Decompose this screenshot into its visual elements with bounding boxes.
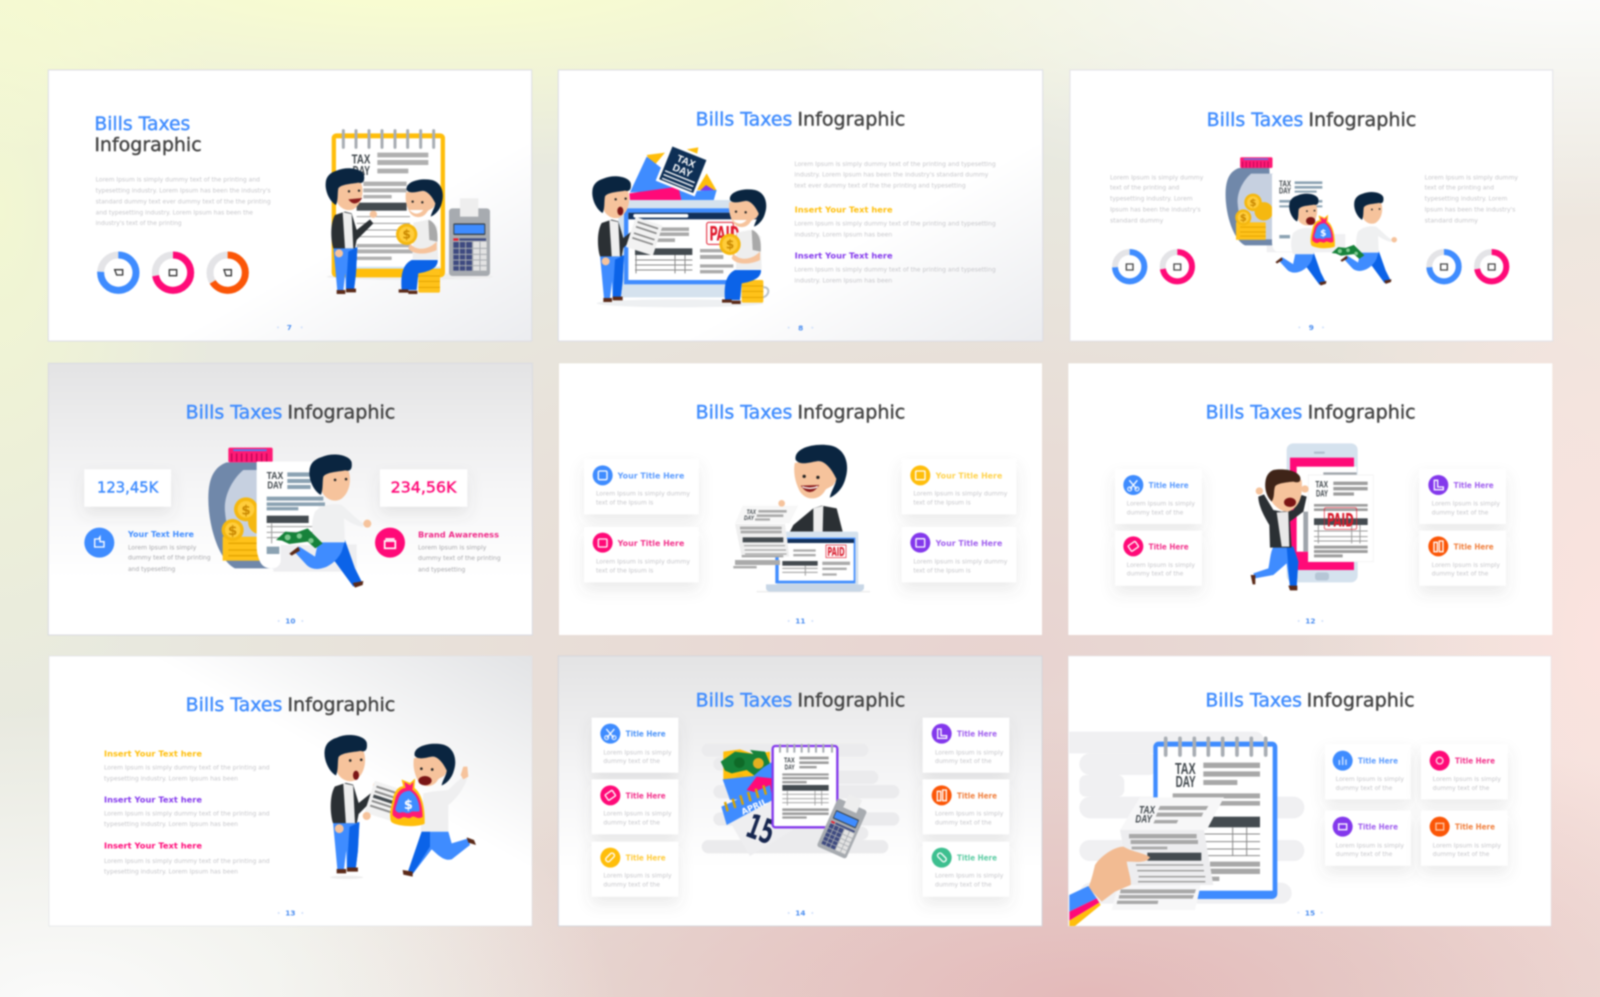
title: Bills Taxes — [1206, 402, 1302, 424]
text block left — [1110, 174, 1204, 225]
title — [696, 109, 905, 131]
card: blue: text of the Ipsum is — [596, 499, 653, 506]
card: pink: dummy text of the — [1433, 785, 1489, 792]
stat card 234,56K: 234,56K — [391, 479, 457, 497]
illustration: wallet, calendar, notebook, calculator: APRIL — [740, 796, 769, 817]
card: purple: text of the Ipsum is — [913, 567, 971, 574]
card: purple: Your Title Here — [935, 539, 1002, 548]
card: purple: dummy text of the — [1336, 851, 1392, 858]
card: orange — [1419, 531, 1506, 586]
page number — [277, 323, 303, 332]
illustration: smiling man with laptop and paper: PAID — [827, 545, 845, 559]
text block left: Ipsum has been the industry's — [1110, 207, 1201, 214]
title — [186, 402, 395, 424]
text block left: typesetting industry. Lorem — [1110, 196, 1193, 203]
text: brand awareness — [418, 530, 501, 573]
illustration: smiling man with laptop and paper — [733, 445, 870, 592]
illustration: jar, tax paper, runner: DAY — [267, 480, 284, 491]
card: pink: Title Here — [626, 791, 666, 800]
card: yellow — [902, 459, 1016, 514]
card: green: Title Here — [957, 854, 997, 863]
text block: and typesetting industry. Lorem Ipsum has been the — [96, 209, 253, 216]
card: green: dummy text of the — [935, 882, 992, 889]
illustration: envelope, screen, two men: PAID — [709, 223, 739, 246]
page number — [788, 617, 813, 626]
card: pink — [1115, 531, 1202, 586]
illustration: notebook, paper, hand: DAY — [1135, 814, 1153, 826]
text block right: Ipsum has been the industry's — [1425, 207, 1515, 214]
text: brand awareness: and typesetting — [418, 566, 465, 573]
text block right — [1425, 174, 1518, 225]
card: purple: Lorem Ipsum is simply — [1432, 501, 1500, 508]
panel: slide 10 — [48, 363, 532, 635]
illustration: envelope, screen, two men: TAX — [675, 153, 697, 171]
card: orange: dummy text of the — [1433, 851, 1489, 858]
text: your text here: Lorem Ipsum is simply — [128, 544, 197, 551]
illustration: envelope, screen, two men — [592, 143, 768, 307]
page number — [788, 323, 813, 332]
card: yellow: text of the Ipsum is — [913, 499, 971, 506]
title: Bills Taxes — [1205, 689, 1302, 711]
card: purple: Title Here — [1454, 481, 1494, 490]
card: pink: Title Here — [1455, 757, 1495, 766]
purple heading with text: Insert Your Text here — [795, 250, 893, 260]
text block right: text of the printing and — [1425, 185, 1494, 192]
card: pink: text of the Ipsum is — [596, 567, 653, 574]
title: Infographic — [1307, 689, 1415, 711]
title: Bills Taxes — [1207, 109, 1303, 131]
text: your text here: dummy text of the printing — [128, 555, 211, 562]
card: orange: Title Here — [1455, 823, 1495, 832]
panel: slide 15 — [1068, 656, 1551, 926]
title: Infographic — [287, 402, 395, 424]
illustration: jar, tax paper, two runners: DAY — [1279, 186, 1291, 195]
card: blue: dummy text of the — [1336, 785, 1392, 792]
page number — [278, 617, 303, 626]
card: blue: dummy text of the — [603, 758, 660, 765]
illustration: smiling man with laptop and paper: DAY — [744, 515, 754, 522]
card: purple — [902, 527, 1016, 582]
page number — [1298, 323, 1324, 332]
card: pink: Your Title Here — [617, 539, 684, 548]
text: your text here: Your Text Here — [127, 530, 194, 539]
yellow heading with text: Lorem Ipsum is simply dummy text of the printing and typesetting — [794, 221, 996, 228]
panel: slide 14 — [558, 656, 1042, 926]
card: yellow: Your Title Here — [935, 471, 1002, 480]
title: Infographic — [287, 694, 395, 716]
panel: slide 7 — [48, 70, 532, 341]
illustration: notebook, paper, hand: TAX — [1139, 804, 1156, 816]
title: Infographic — [94, 134, 202, 156]
page number: 12 — [1305, 617, 1315, 626]
illustration: jar, tax paper, runner — [208, 448, 371, 588]
card: blue: Title Here — [1358, 757, 1398, 766]
illustration: notebook, calculator, two men — [326, 131, 493, 294]
title: Bills Taxes — [696, 689, 792, 711]
text: brand awareness: Lorem Ipsum is simply — [418, 545, 487, 552]
card: blue: Lorem Ipsum is simply dummy — [596, 491, 690, 498]
title: Bills Taxes — [186, 694, 282, 716]
page number — [788, 909, 813, 918]
panel: slide 12 — [1068, 363, 1552, 635]
illustration: phone, paid bill, panicked man: PAID — [1327, 511, 1354, 532]
card: green: Lorem Ipsum is simply — [935, 873, 1004, 880]
pink heading with text: Lorem Ipsum is simply dummy text of the printing and — [104, 858, 270, 865]
title: Bills Taxes — [186, 402, 282, 424]
text: your text here: and typesetting — [128, 566, 175, 573]
card: pink: dummy text of the — [1127, 571, 1183, 578]
card: pink: dummy text of the — [603, 819, 660, 826]
card: orange — [1421, 811, 1508, 866]
text block: typesetting industry. Lorem Ipsum has been the industry's — [96, 187, 271, 194]
text block right: standard dummy — [1425, 218, 1478, 225]
card: purple: Lorem Ipsum is simply — [1336, 842, 1404, 849]
card: blue: Your Title Here — [617, 471, 684, 480]
card: orange: Lorem Ipsum is simply — [1432, 562, 1500, 569]
illustration: wallet, calendar, notebook, calculator: DAY — [785, 762, 795, 771]
illustration: jar, tax paper, two runners — [1226, 157, 1397, 286]
pink heading with text: typesetting industry. Lorem Ipsum has been — [104, 869, 238, 876]
yellow heading with text — [104, 749, 270, 782]
title: Infographic — [797, 109, 905, 131]
title: Infographic — [797, 402, 905, 424]
panel: slide 11 — [559, 363, 1042, 635]
text block left: text of the printing and — [1110, 185, 1179, 192]
illustration: envelope, screen, two men: DAY — [671, 163, 694, 180]
card: pink: Lorem Ipsum is simply dummy — [596, 558, 690, 565]
stat card 123,45K — [84, 469, 171, 507]
page number: 7 — [287, 323, 292, 332]
card: pink: Lorem Ipsum is simply — [1127, 562, 1195, 569]
card: blue: Title Here — [626, 730, 666, 739]
purple heading with text: Insert Your Text here — [104, 795, 202, 805]
illustration: phone, paid bill, panicked man — [1251, 443, 1373, 590]
text block: text ever dummy text of the the printing and typesetting — [794, 183, 966, 190]
panel: slide 8 — [558, 70, 1043, 341]
text block: standard dummy text ever dummy text of the the printing — [96, 198, 271, 205]
purple heading with text: industry. Lorem Ipsum has been — [794, 277, 892, 284]
card: orange: dummy text of the — [1432, 571, 1488, 578]
illustration: notebook, calculator, two men: TAX — [352, 151, 370, 166]
title: Infographic — [797, 689, 905, 711]
illustration: notebook, paper, hand: TAX — [1175, 761, 1196, 778]
card: yellow: dummy text of the — [603, 882, 660, 889]
illustration: notebook, calculator, two men: DAY — [353, 163, 370, 178]
donut charts with icons — [101, 255, 245, 290]
purple heading with text — [794, 250, 996, 284]
panel: slide 9 — [1070, 70, 1553, 341]
purple heading with text: Lorem Ipsum is simply dummy text of the printing and typesetting — [794, 267, 996, 274]
illustration: phone, paid bill, panicked man: TAX — [1315, 480, 1328, 490]
text: brand awareness: Brand Awareness — [418, 530, 499, 539]
page number: 11 — [795, 617, 805, 626]
text block: industry's text of the printing — [96, 220, 182, 227]
illustration: jar, tax paper, runner: TAX — [267, 471, 284, 482]
card: purple — [923, 718, 1009, 773]
card: orange: Lorem Ipsum is simply — [935, 811, 1004, 818]
card: blue: Lorem Ipsum is simply — [603, 749, 672, 756]
page number: 14 — [795, 909, 805, 918]
card: pink: Title Here — [1149, 543, 1189, 552]
title: Infographic — [1308, 402, 1416, 424]
card: purple — [1419, 469, 1506, 524]
stat card 234,56K — [380, 469, 467, 507]
illustration: notebook, paper, hand: DAY — [1176, 774, 1196, 791]
card: orange: Title Here — [1454, 543, 1494, 552]
card: purple — [1325, 811, 1411, 866]
title: Bills Taxes — [696, 109, 792, 131]
donut charts left — [1115, 252, 1192, 281]
card: pink: Lorem Ipsum is simply — [603, 811, 672, 818]
page number — [1298, 617, 1323, 626]
title: Bills Taxes — [94, 113, 190, 135]
title — [1206, 402, 1416, 424]
card: blue: dummy text of the — [1127, 509, 1183, 516]
card: yellow — [592, 842, 678, 897]
card: purple: Title Here — [1358, 823, 1398, 832]
title — [1207, 109, 1416, 131]
card: yellow: Lorem Ipsum is simply — [603, 873, 672, 880]
title: Bills Taxes — [696, 402, 792, 424]
card: blue — [1115, 469, 1202, 524]
illustration: notebook, paper, hand — [1069, 732, 1304, 926]
stat card 123,45K: 123,45K — [97, 479, 159, 497]
text block right: typesetting industry. Lorem — [1425, 196, 1507, 203]
card: blue — [1325, 744, 1411, 799]
yellow heading with text: typesetting industry. Lorem Ipsum has been — [104, 775, 238, 782]
donut charts right — [1429, 252, 1506, 281]
panel: slide 13 — [49, 656, 532, 926]
page number: 15 — [1305, 908, 1315, 917]
purple heading with text — [104, 795, 270, 828]
card: yellow: Lorem Ipsum is simply dummy — [913, 491, 1008, 498]
card: orange: dummy text of the — [935, 819, 992, 826]
text: brand awareness: dummy text of the printing — [418, 555, 501, 562]
purple heading with text: typesetting industry. Lorem Ipsum has been — [104, 821, 238, 828]
page number: 8 — [798, 323, 803, 332]
text block: Lorem Ipsum is simply dummy text of the printing and — [96, 177, 260, 184]
card: orange: Lorem Ipsum is simply — [1433, 842, 1501, 849]
text block — [794, 161, 996, 190]
title: Infographic — [1308, 109, 1416, 131]
text block: industry. Lorem Ipsum has been the industry's standard dummy — [794, 172, 989, 179]
text: your text here — [127, 530, 211, 573]
page number: 13 — [285, 909, 295, 918]
title — [94, 113, 202, 156]
card: purple: dummy text of the — [1432, 509, 1488, 516]
card: pink — [592, 779, 678, 834]
text block left: Lorem Ipsum is simply dummy — [1110, 174, 1204, 181]
card: blue: Title Here — [1149, 481, 1189, 490]
title — [696, 402, 905, 424]
pink heading with text: Insert Your Text here — [104, 841, 202, 851]
card: blue — [592, 718, 678, 773]
card: pink — [584, 527, 699, 582]
card: purple: Title Here — [957, 730, 997, 739]
card: blue — [584, 459, 699, 514]
page number — [278, 909, 303, 918]
text block left: standard dummy — [1110, 218, 1164, 225]
illustration: wallet, calendar, notebook, calculator: TAX — [784, 756, 795, 765]
illustration: two men and money bag — [324, 735, 476, 879]
pink heading with text — [104, 841, 270, 876]
page number: 10 — [285, 617, 295, 626]
page number: 9 — [1309, 323, 1314, 332]
card: purple: Lorem Ipsum is simply dummy — [913, 558, 1008, 565]
card: pink: Lorem Ipsum is simply — [1433, 776, 1501, 783]
icon: pink circle — [375, 528, 405, 558]
purple heading with text: Lorem Ipsum is simply dummy text of the printing and — [104, 811, 270, 818]
card: blue: Lorem Ipsum is simply — [1336, 776, 1404, 783]
illustration: jar, tax paper, two runners: TAX — [1279, 180, 1292, 189]
card: green — [923, 842, 1009, 897]
illustration: wallet, calendar, notebook, calculator: 15 — [741, 806, 780, 852]
icon: blue circle — [84, 528, 114, 558]
card: purple: Lorem Ipsum is simply — [935, 749, 1004, 756]
yellow heading with text: Insert Your Text here — [795, 205, 893, 215]
text block: Lorem Ipsum is simply dummy text of the printing and typesetting — [794, 161, 996, 168]
yellow heading with text — [794, 205, 996, 238]
illustration: phone, paid bill, panicked man: DAY — [1316, 488, 1328, 498]
card: orange — [923, 779, 1009, 834]
page number — [1297, 908, 1323, 917]
illustration: wallet, calendar, notebook, calculator — [702, 743, 899, 859]
yellow heading with text: Insert Your Text here — [104, 749, 202, 759]
illustration: smiling man with laptop and paper: TAX — [747, 509, 756, 516]
card: blue: Lorem Ipsum is simply — [1127, 501, 1195, 508]
card: pink — [1421, 744, 1508, 799]
text block — [96, 177, 271, 227]
yellow heading with text: Lorem Ipsum is simply dummy text of the printing and — [104, 765, 270, 772]
card: orange: Title Here — [957, 791, 997, 800]
text block right: Lorem Ipsum is simply dummy — [1425, 174, 1518, 181]
card: purple: dummy text of the — [935, 758, 992, 765]
yellow heading with text: industry. Lorem Ipsum has been — [794, 231, 892, 238]
title — [1205, 689, 1415, 711]
title — [186, 694, 395, 716]
card: yellow: Title Here — [626, 854, 666, 863]
title — [696, 689, 905, 711]
